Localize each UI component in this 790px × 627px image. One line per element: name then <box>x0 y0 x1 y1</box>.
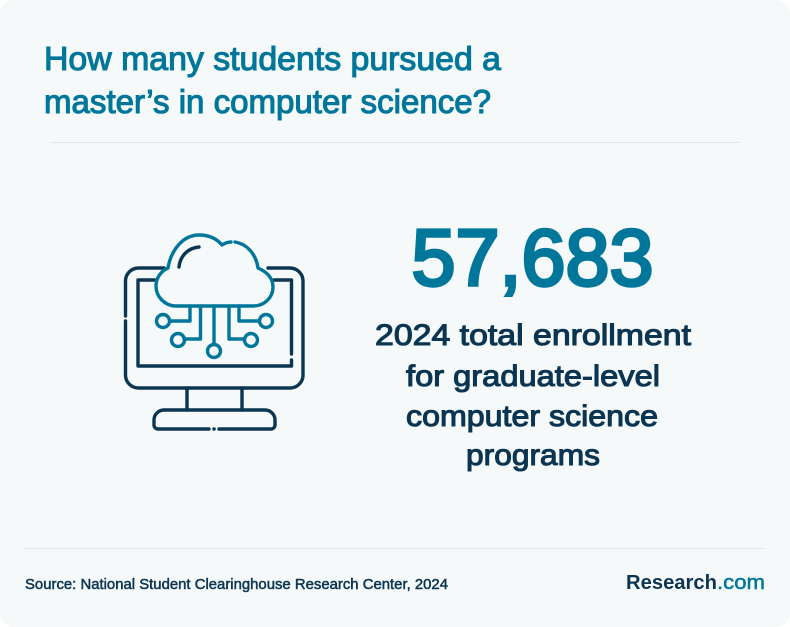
title: master’s in computer science? <box>44 83 491 120</box>
icon: monitor with cloud network <box>126 235 303 429</box>
monitor <box>126 268 303 429</box>
cloud highlight <box>179 247 199 267</box>
cloud and circuit <box>156 235 273 358</box>
title: How many students pursued a <box>44 40 502 77</box>
logo: Research.com: Research <box>626 571 717 594</box>
logo: Research.com: .com <box>717 571 765 594</box>
statistic number: 57,683 <box>412 213 654 302</box>
source note: Source: National Student Clearinghouse Research Center, 2024 <box>25 577 448 593</box>
title <box>44 40 502 120</box>
statistic description: computer science <box>406 400 658 433</box>
statistic description: programs <box>466 439 600 472</box>
logo: Research.com <box>626 571 765 594</box>
statistic description: 2024 total enrollment <box>375 319 692 352</box>
statistic description <box>375 319 692 472</box>
statistic description: for graduate-level <box>406 360 660 393</box>
